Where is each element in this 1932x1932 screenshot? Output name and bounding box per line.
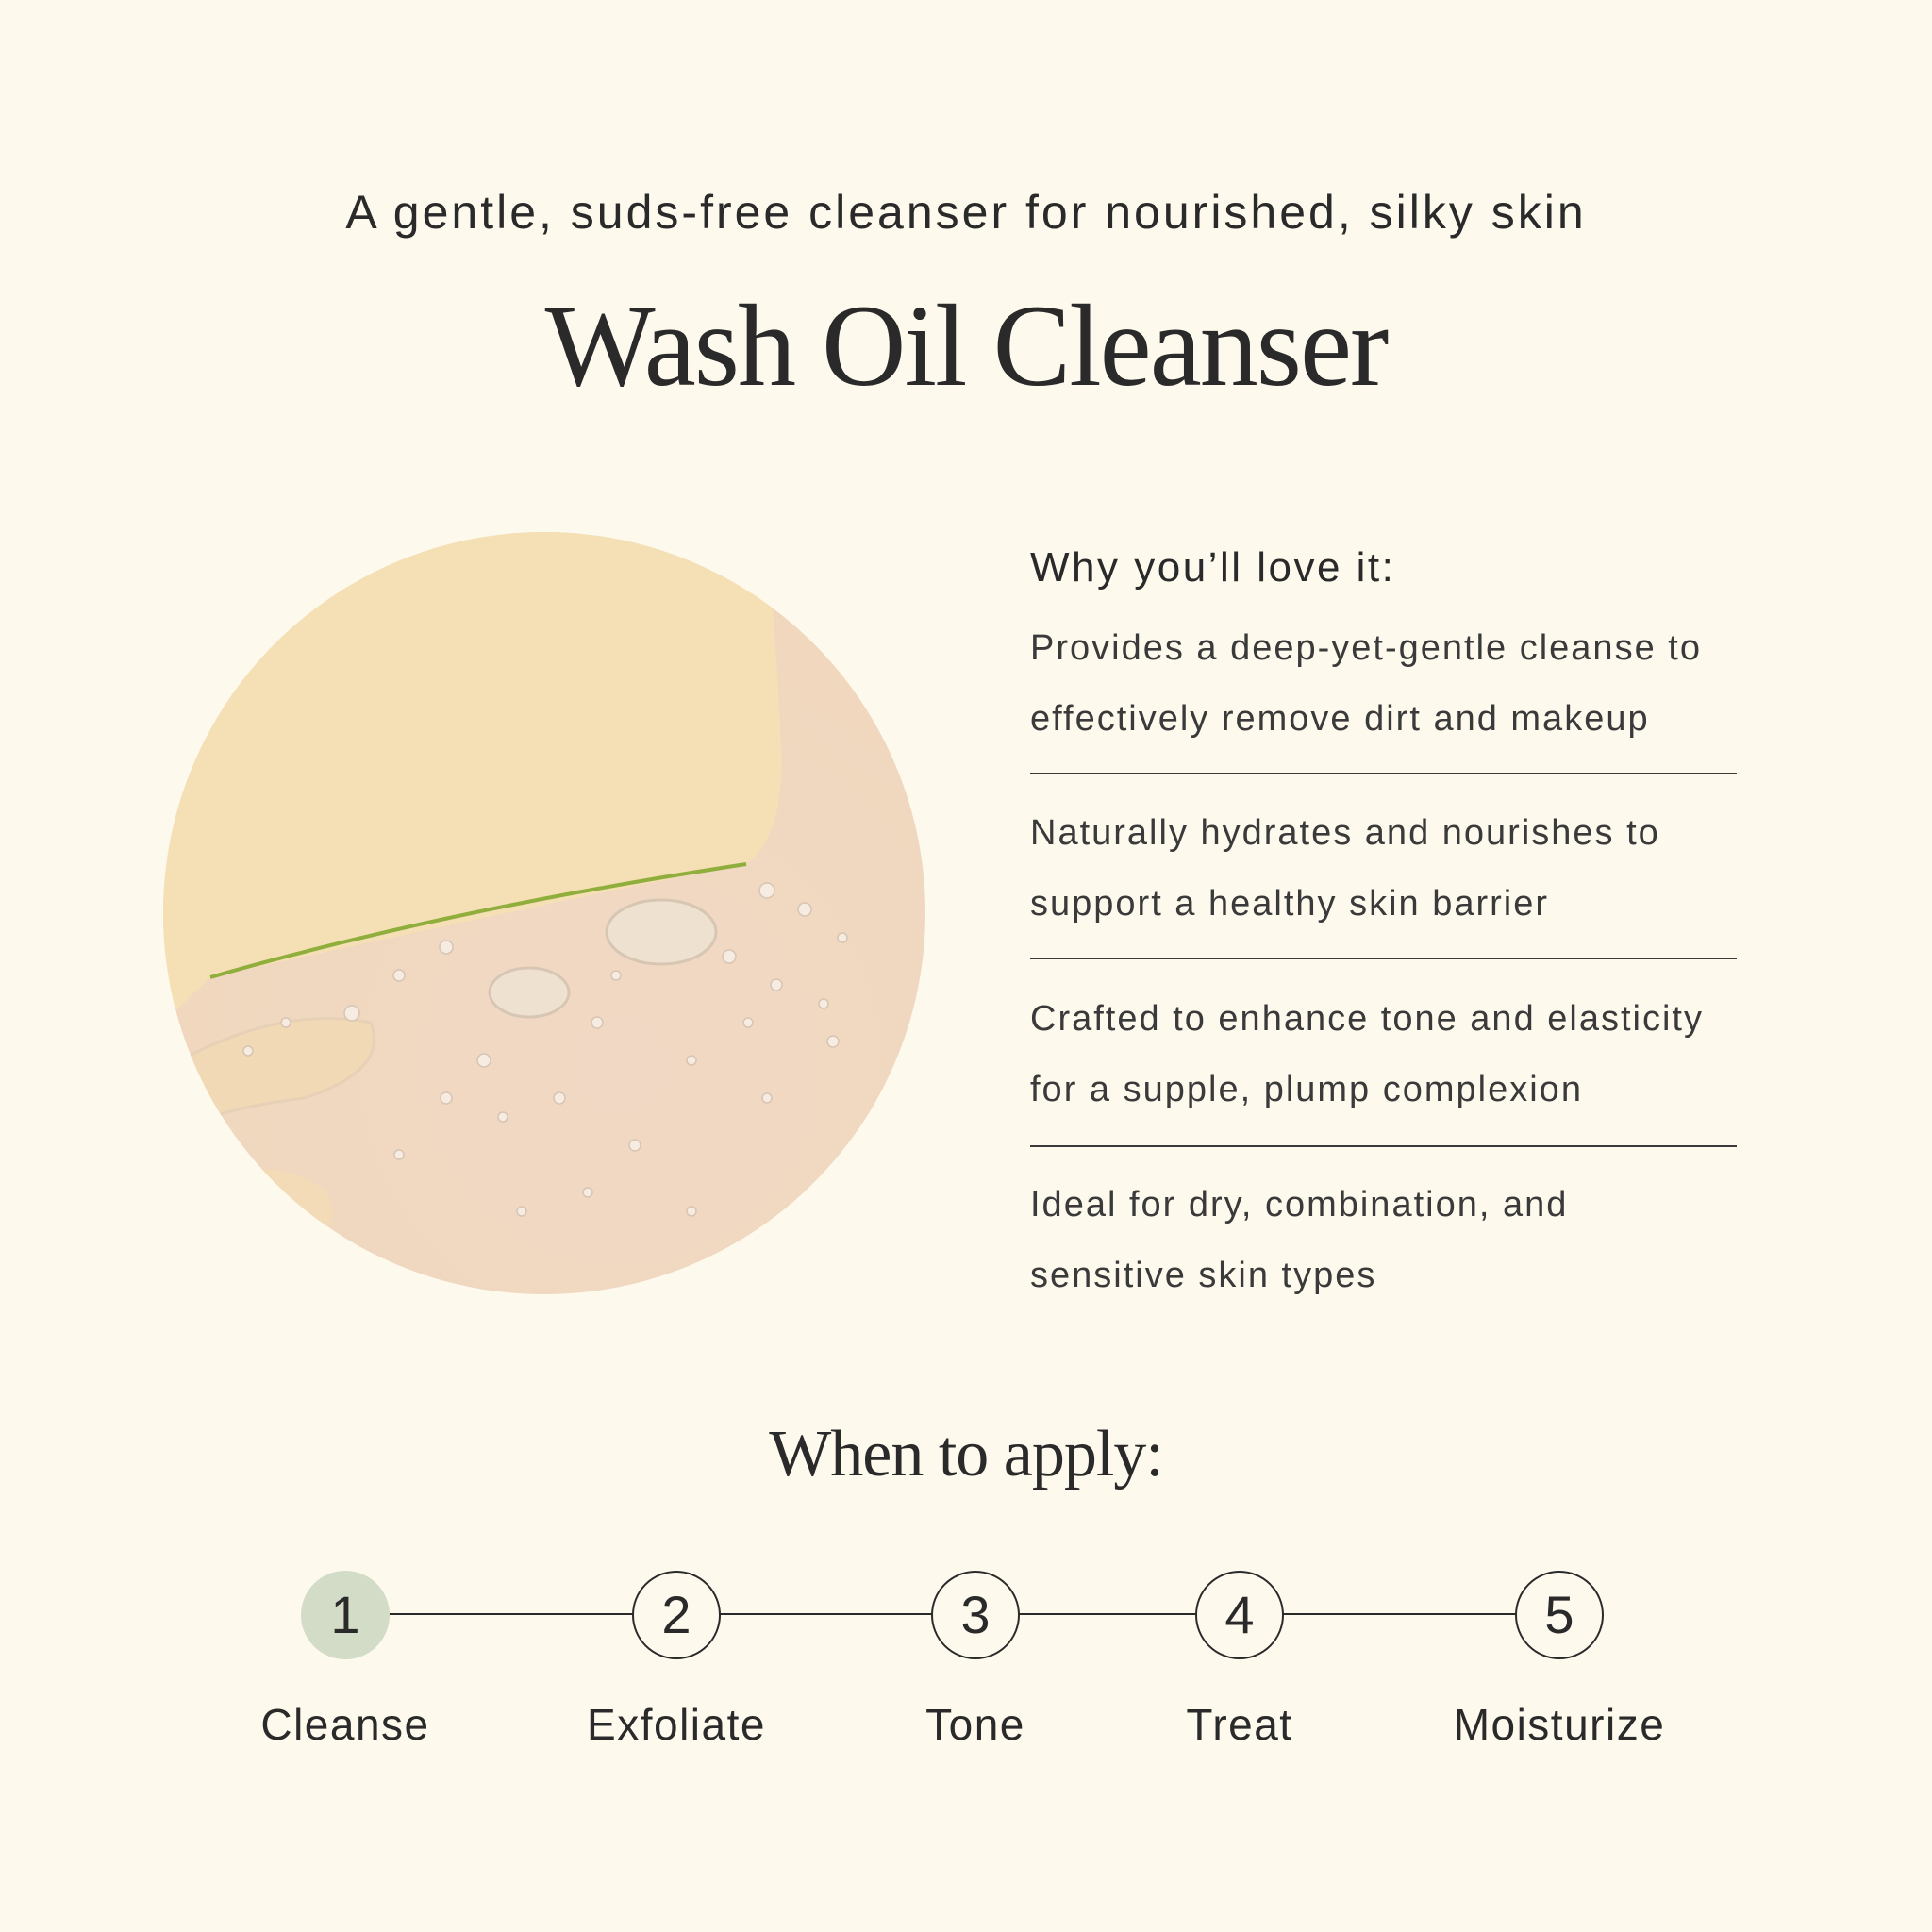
benefit 3: Crafted to enhance tone and elasticity [1030, 999, 1704, 1039]
heading: when to apply: When to apply: [769, 1418, 1163, 1491]
step 3 tone [931, 1571, 1020, 1659]
label tone: Tone [925, 1700, 1025, 1749]
benefit 4: Ideal for dry, combination, and [1030, 1185, 1568, 1224]
step 5 moisturize [1515, 1571, 1604, 1659]
label moisturize: Moisturize [1454, 1700, 1665, 1749]
title: Wash Oil Cleanser [545, 281, 1387, 410]
benefit 2: support a healthy skin barrier [1030, 884, 1549, 924]
benefit 2 [1030, 813, 1660, 924]
subtitle: A gentle, suds-free cleanser for nourished, silky skin [345, 186, 1587, 239]
step 2 exfoliate: 2 [661, 1585, 691, 1644]
image: oil droplets circle [163, 532, 925, 1294]
step 5 moisturize: 5 [1544, 1585, 1574, 1644]
routine steps [389, 1613, 1515, 1615]
step 1 cleanse [301, 1571, 390, 1659]
label treat: Treat [1186, 1700, 1293, 1749]
step 2 exfoliate [632, 1571, 721, 1659]
benefit 2: Naturally hydrates and nourishes to [1030, 813, 1660, 853]
benefit 1: Provides a deep-yet-gentle cleanse to [1030, 628, 1702, 668]
label exfoliate: Exfoliate [587, 1700, 766, 1749]
benefit 1 [1030, 628, 1702, 739]
step 4 treat [1195, 1571, 1284, 1659]
benefit 3: for a supple, plump complexion [1030, 1070, 1583, 1109]
heading: why you'll love it: Why you’ll love it: [1030, 544, 1395, 591]
benefit 4: sensitive skin types [1030, 1256, 1376, 1295]
step 1 cleanse: 1 [330, 1585, 360, 1644]
benefit 4 [1030, 1185, 1568, 1295]
benefit 1: effectively remove dirt and makeup [1030, 699, 1650, 739]
benefit 3 [1030, 999, 1704, 1109]
step 3 tone: 3 [960, 1585, 991, 1644]
step 4 treat: 4 [1224, 1585, 1255, 1644]
label cleanse: Cleanse [260, 1700, 430, 1749]
